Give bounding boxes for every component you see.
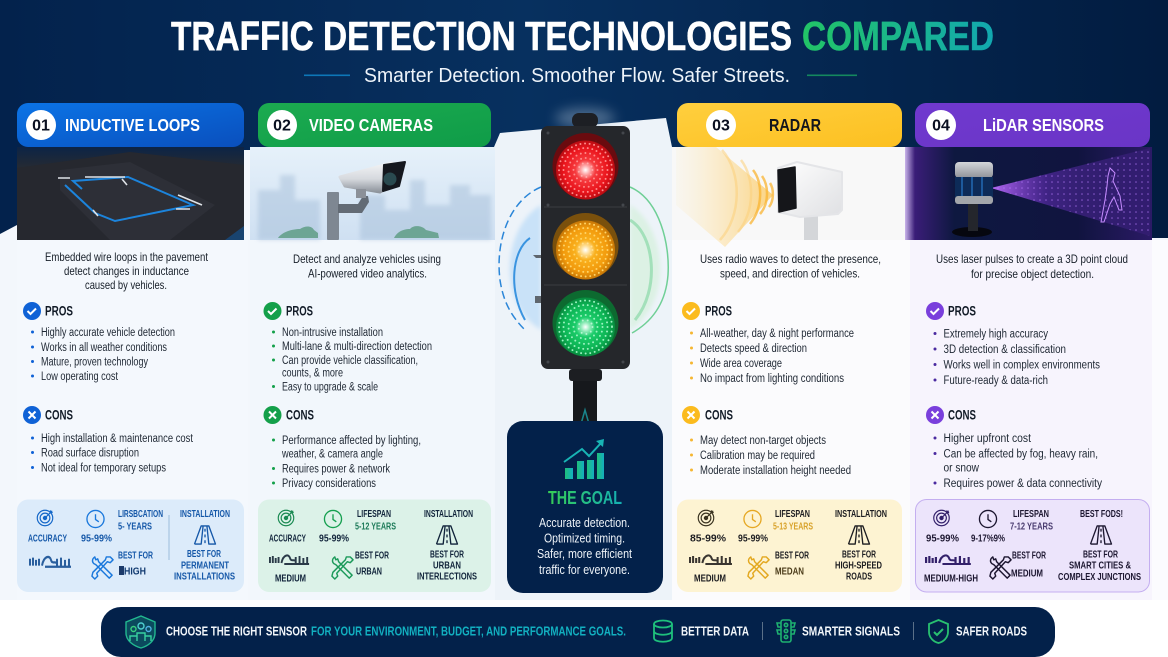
panel: lidar sensors bbox=[905, 103, 1152, 600]
pros list: PROS bbox=[948, 304, 976, 318]
description: caused by vehicles. bbox=[85, 278, 167, 292]
cons list bbox=[264, 406, 421, 490]
goal panel: Optimized timing. bbox=[544, 532, 625, 546]
footer banner: SMARTER SIGNALS bbox=[802, 624, 900, 638]
stats card: BEST FOR bbox=[187, 549, 222, 560]
description bbox=[936, 252, 1128, 281]
icon: shield check bbox=[929, 620, 948, 643]
pros list: PROS bbox=[286, 304, 313, 318]
footer banner: FOR YOUR ENVIRONMENT, BUDGET, AND PERFORMANCE GOALS. bbox=[311, 624, 626, 638]
description: Detect and analyze vehicles using bbox=[293, 252, 441, 266]
header: 01 inductive loops: 01 bbox=[32, 118, 50, 134]
stats card: BEST FOR bbox=[1083, 550, 1119, 560]
pros list: Low operating cost bbox=[41, 371, 119, 383]
stats card: 7-12 YEARS bbox=[1010, 522, 1053, 532]
title: TRAFFIC DETECTION TECHNOLOGIES bbox=[171, 13, 792, 59]
cons list: CONS bbox=[45, 408, 73, 422]
cons list: Calibration may be required bbox=[700, 450, 815, 462]
pros list: Mature, proven technology bbox=[41, 356, 148, 368]
footer banner: SAFER ROADS bbox=[956, 624, 1027, 638]
pros list: Works well in complex environments bbox=[944, 360, 1100, 372]
stats card: BEST FOR bbox=[1012, 550, 1047, 562]
cons list bbox=[682, 406, 851, 477]
stats card: PERMANENT bbox=[181, 560, 229, 572]
cons list: High installation & maintenance cost bbox=[41, 433, 194, 445]
pros list: PROS bbox=[45, 304, 73, 318]
stats card bbox=[916, 500, 1150, 592]
title: COMPARED bbox=[802, 13, 994, 59]
green lamp bbox=[552, 290, 618, 356]
stats card: INSTALLATION bbox=[424, 509, 473, 520]
stats card: BEST FOR bbox=[842, 550, 877, 560]
description: speed, and direction of vehicles. bbox=[720, 266, 860, 280]
stats card: 5-13 YEARS bbox=[773, 522, 813, 532]
stats card: LIFESPAN bbox=[1013, 509, 1049, 520]
goal panel: THE GOAL bbox=[548, 488, 622, 508]
description: AI-powered video analytics. bbox=[308, 266, 427, 280]
goal panel: Accurate detection. bbox=[539, 516, 630, 530]
panel: radar bbox=[672, 103, 910, 600]
footer banner: CHOOSE THE RIGHT SENSOR bbox=[166, 624, 307, 638]
stats card: ACCURACY bbox=[28, 534, 67, 544]
goal panel: traffic for everyone. bbox=[539, 563, 630, 577]
image: lidar sensor and point cloud bbox=[905, 147, 1152, 240]
stats card: INSTALLATIONS bbox=[174, 572, 235, 582]
pros list bbox=[23, 302, 175, 383]
stats card: ACCURACY bbox=[269, 534, 306, 544]
stats card: LIRSBCATION bbox=[118, 509, 163, 520]
description bbox=[293, 252, 441, 280]
goal panel bbox=[507, 421, 663, 593]
description bbox=[45, 250, 209, 292]
stats card: 95-99% bbox=[926, 534, 959, 544]
stats card: LIFESPAN bbox=[775, 509, 810, 520]
stats card: MEDIUM bbox=[275, 574, 306, 584]
pros list: Can provide vehicle classification, bbox=[282, 355, 418, 367]
stats card: 5- YEARS bbox=[118, 522, 152, 532]
pros list bbox=[926, 302, 1100, 387]
stats card: INTERLECTIONS bbox=[417, 572, 477, 582]
header: 03 radar bbox=[677, 103, 902, 147]
stats card: HIGH bbox=[124, 566, 146, 578]
pros list: Multi-lane & multi-direction detection bbox=[282, 341, 432, 353]
pros list: All-weather, day & night performance bbox=[700, 328, 854, 340]
description: Uses radio waves to detect the presence, bbox=[700, 252, 881, 266]
footer banner bbox=[101, 607, 1055, 657]
cons list: CONS bbox=[705, 408, 733, 422]
stats card: 95-99% bbox=[319, 534, 349, 544]
cons list: Performance affected by lighting, bbox=[282, 435, 421, 447]
image: pavement with embedded wire loop bbox=[17, 147, 244, 240]
image: roadside camera and city bbox=[250, 147, 495, 240]
description bbox=[700, 252, 881, 280]
header: 04 lidar sensors: LiDAR SENSORS bbox=[983, 115, 1104, 135]
pros list: No impact from lighting conditions bbox=[700, 373, 844, 385]
cons list: CONS bbox=[286, 408, 314, 422]
pros list: Detects speed & direction bbox=[700, 343, 807, 355]
icon: database bbox=[654, 620, 672, 642]
stats card: MEDAN bbox=[775, 566, 804, 578]
pros list: Highly accurate vehicle detection bbox=[41, 327, 175, 339]
stats card: MEDIUM bbox=[694, 574, 726, 584]
pros list: Future-ready & data-rich bbox=[944, 375, 1048, 387]
stats card: BEST FOR bbox=[430, 550, 465, 560]
stats card bbox=[17, 500, 244, 592]
cons list: Requires power & network bbox=[282, 464, 390, 476]
pros list: Works in all weather conditions bbox=[41, 342, 167, 354]
stats card: 9-17%9% bbox=[971, 534, 1005, 544]
signal halo rings bbox=[499, 187, 668, 333]
cons list: Can be affected by fog, heavy rain, bbox=[944, 448, 1098, 460]
footer banner: BETTER DATA bbox=[681, 624, 749, 638]
pros list: PROS bbox=[705, 304, 732, 318]
cons list: Moderate installation height needed bbox=[700, 465, 851, 477]
cons list: Privacy considerations bbox=[282, 478, 376, 490]
icon: people in shield bbox=[126, 616, 155, 648]
panel: video cameras bbox=[250, 103, 495, 600]
header: 01 inductive loops bbox=[17, 103, 244, 147]
header: 04 lidar sensors: 04 bbox=[932, 118, 950, 134]
header: 04 lidar sensors bbox=[915, 103, 1150, 147]
description: Uses laser pulses to create a 3D point cloud bbox=[936, 252, 1128, 266]
cons list: Not ideal for temporary setups bbox=[41, 462, 166, 474]
pros list: counts, & more bbox=[282, 368, 343, 380]
icon: signal bbox=[777, 620, 795, 642]
central traffic light scene bbox=[499, 113, 668, 593]
stats card: BEST FOR bbox=[775, 550, 810, 562]
pros list: Wide area coverage bbox=[700, 358, 782, 370]
amber lamp bbox=[552, 213, 618, 280]
cons list bbox=[926, 406, 1102, 490]
pros list bbox=[682, 302, 854, 385]
stats card bbox=[677, 500, 902, 592]
description: detect changes in inductance bbox=[64, 264, 189, 278]
cons list: Higher upfront cost bbox=[944, 433, 1032, 445]
stats card: 95-99% bbox=[81, 534, 112, 544]
cons list: Road surface disruption bbox=[41, 448, 139, 460]
stats card: URBAN bbox=[433, 560, 461, 572]
image: radar sensor with waves bbox=[672, 147, 910, 247]
pole bbox=[569, 369, 602, 424]
cons list: or snow bbox=[944, 462, 980, 474]
pros list: 3D detection & classification bbox=[944, 344, 1066, 356]
header: 02 video cameras: VIDEO CAMERAS bbox=[309, 115, 433, 135]
stats card: SMART CITIES & bbox=[1069, 560, 1131, 572]
goal panel: Safer, more efficient bbox=[537, 547, 632, 561]
stats card: LIFESPAN bbox=[357, 509, 391, 520]
pros list: Easy to upgrade & scale bbox=[282, 382, 378, 394]
stats card: COMPLEX JUNCTIONS bbox=[1058, 572, 1141, 583]
icon: rising bar chart bbox=[564, 439, 604, 479]
cons list: CONS bbox=[948, 408, 976, 422]
cons list: weather, & camera angle bbox=[281, 448, 383, 460]
header: 02 video cameras: 02 bbox=[273, 118, 291, 134]
stats card: INSTALLATION bbox=[835, 509, 887, 520]
pros list: Non-intrusive installation bbox=[282, 327, 383, 339]
stats card: INSTALLATION bbox=[180, 509, 230, 520]
stats card: MEDIUM-HIGH bbox=[924, 574, 978, 584]
cons list: May detect non-target objects bbox=[700, 435, 826, 447]
description: for precise object detection. bbox=[971, 267, 1094, 281]
header: 01 inductive loops: INDUCTIVE LOOPS bbox=[65, 115, 200, 135]
header: 03 radar: RADAR bbox=[769, 115, 821, 135]
subtitle: Smarter Detection. Smoother Flow. Safer Streets. bbox=[364, 65, 790, 87]
stats card: BEST FOR bbox=[355, 550, 390, 562]
traffic light housing bbox=[533, 113, 630, 369]
stats card: BEST FODS! bbox=[1080, 509, 1123, 520]
red lamp bbox=[552, 133, 618, 200]
stats card: 95-99% bbox=[738, 534, 768, 544]
stats card: MEDIUM bbox=[1011, 568, 1043, 580]
header: 02 video cameras bbox=[258, 103, 491, 147]
cons list: Requires power & data connectivity bbox=[944, 478, 1102, 490]
stats card: URBAN bbox=[356, 566, 382, 578]
description: Embedded wire loops in the pavement bbox=[45, 250, 209, 264]
stats card: 5-12 YEARS bbox=[355, 522, 396, 532]
stats card: 85-99% bbox=[690, 534, 726, 544]
cons list bbox=[23, 406, 194, 474]
pros list bbox=[264, 302, 432, 394]
pros list: Extremely high accuracy bbox=[944, 328, 1048, 340]
panel: inductive loops bbox=[17, 103, 248, 600]
stats card: ROADS bbox=[846, 572, 872, 582]
stats card bbox=[258, 500, 491, 592]
stats card: BEST FOR bbox=[118, 550, 154, 562]
header: 03 radar: 03 bbox=[712, 118, 730, 134]
stats card: HIGH-SPEED bbox=[835, 560, 882, 572]
